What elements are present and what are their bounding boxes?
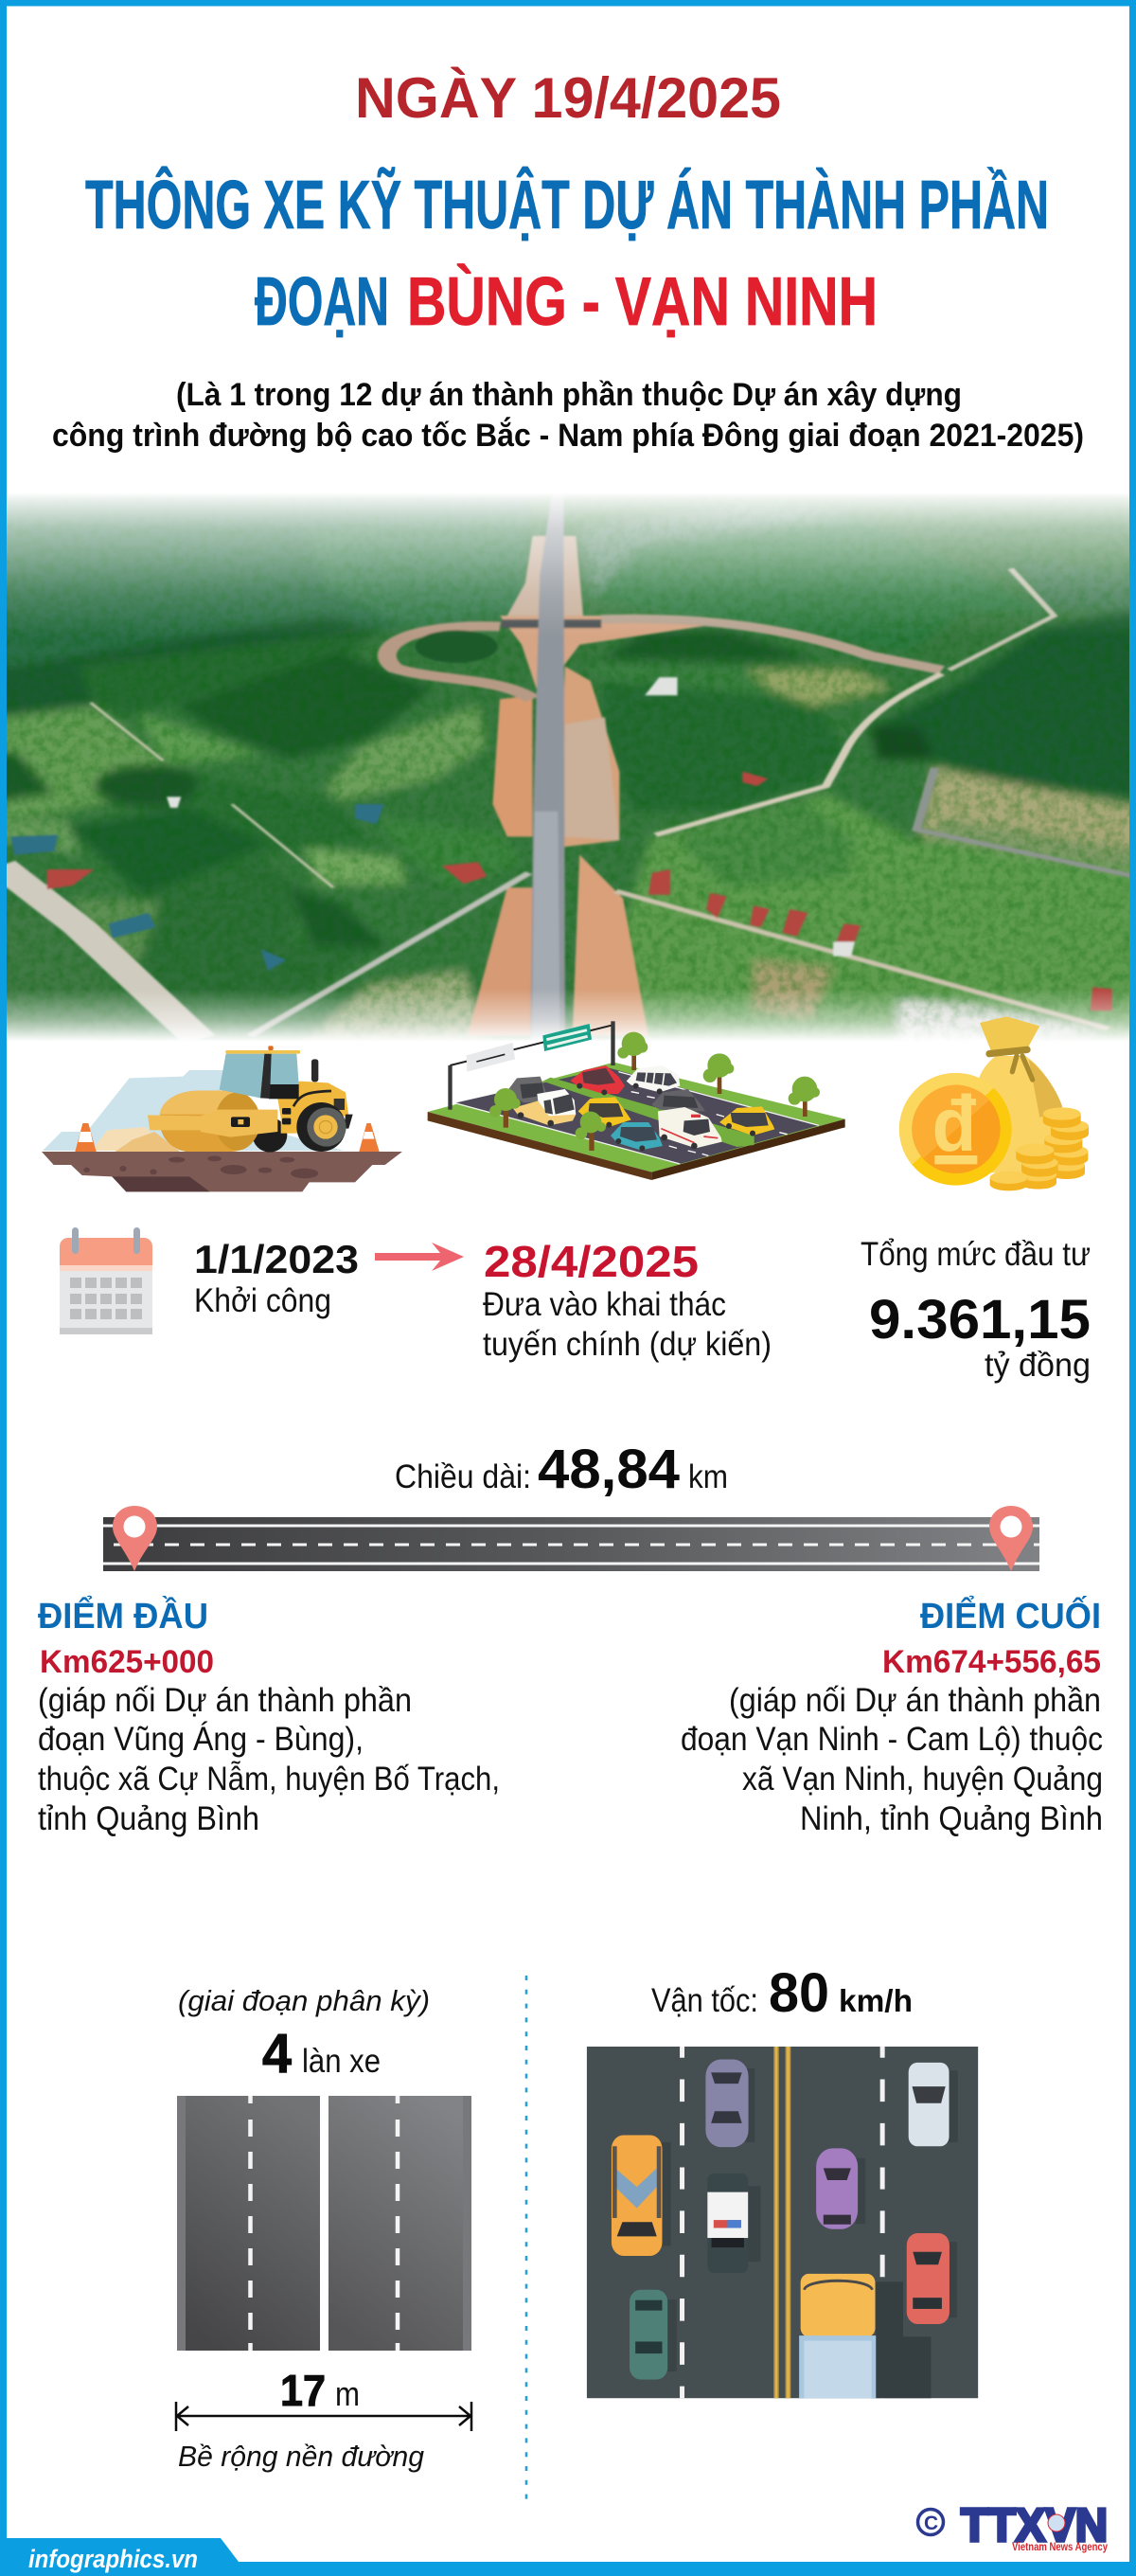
total investment text: Tổng mức đầu tư [861, 1236, 1091, 1273]
lanes label: (giai đoạn phân kỳ) [178, 1984, 430, 2017]
text block: start point: (giáp nối Dự án thành phần [38, 1682, 412, 1719]
agency wordmark: TTXVN [961, 2500, 1108, 2551]
copyright mark [918, 2510, 943, 2534]
logo: TTXVN [918, 2500, 1108, 2553]
text block: end point: (giáp nối Dự án thành phần [729, 1682, 1101, 1719]
sub-icon: white car [909, 2063, 958, 2146]
road strip with start and end pins [103, 1506, 1039, 1571]
copyright mark: C [924, 2513, 938, 2534]
sub-icon: purple car [816, 2148, 865, 2229]
text block: start point [38, 1594, 500, 1837]
length label [395, 1439, 728, 1500]
icon: start pin [113, 1506, 157, 1571]
sub-icon: trees [489, 1032, 820, 1151]
width label and dimension arrow: 17 [280, 2366, 326, 2415]
agency subline: Vietnam News Agency [1012, 2542, 1108, 2553]
heading: main title line 2: ĐOẠN [255, 264, 389, 340]
text block: start point: thuộc xã Cự Nẫm, huyện Bố Trạch, [38, 1761, 500, 1798]
icon: highway with traffic [428, 1021, 845, 1180]
lanes label: 4 [262, 2023, 292, 2084]
speed label: 80 [769, 1962, 829, 2024]
speed label: km/h [839, 1983, 913, 2018]
sub-icon: police car [707, 2174, 761, 2273]
length label: Chiều dài: [395, 1458, 531, 1495]
text block: end point: ĐIỂM CUỐI [920, 1594, 1101, 1637]
width label and dimension arrow [176, 2366, 471, 2473]
speed label: Vận tốc: [651, 1982, 758, 2019]
text block: start point: ĐIỂM ĐẦU [38, 1594, 208, 1637]
title block [52, 66, 1084, 454]
width label and dimension arrow: Bề rộng nền đường [178, 2440, 424, 2473]
length label: 48,84 [538, 1439, 680, 1500]
opening date text: Đưa vào khai thác [483, 1286, 726, 1323]
speed label [651, 1962, 913, 2024]
opening date text: tuyến chính (dự kiến) [483, 1326, 772, 1363]
arrow: start to opening [375, 1243, 464, 1271]
dotted divider [525, 1976, 527, 2506]
start date text [194, 1237, 359, 1319]
sub-icon: red car [907, 2233, 957, 2324]
sub-icon: orange van [612, 2135, 671, 2256]
total investment text [861, 1236, 1091, 1384]
globe in wordmark [1048, 2514, 1065, 2531]
text block: end point: xã Vạn Ninh, huyện Quảng [742, 1761, 1103, 1798]
subtitle text: công trình đường bộ cao tốc Bắc - Nam phía Đông giai đoạn 2021-2025) [52, 418, 1084, 454]
lanes label: làn xe [302, 2043, 381, 2080]
sub-icon: grey-purple car [705, 2059, 754, 2147]
start date text: 1/1/2023 [194, 1237, 359, 1281]
subtitle text [52, 377, 1084, 454]
icon: money bag and dong coins [899, 1016, 1089, 1190]
footer bar with website tab: infographics.vn [28, 2545, 198, 2573]
icon: end pin [989, 1506, 1033, 1571]
icon: calendar [60, 1227, 152, 1334]
road cross-section diagram [177, 2096, 471, 2351]
icon: road roller [42, 1046, 402, 1191]
length label: km [688, 1458, 728, 1495]
aerial photo of expressway interchange [7, 495, 1129, 1040]
total investment text: 9.361,15 [869, 1289, 1091, 1351]
heading: main title line 2 [255, 263, 878, 340]
total investment text: tỷ đồng [985, 1347, 1091, 1384]
opening date text [483, 1237, 772, 1363]
subtitle text: (Là 1 trong 12 dự án thành phần thuộc Dự án xây dựng [176, 377, 962, 413]
footer bar with website tab [0, 2538, 1136, 2576]
text block: end point: đoạn Vạn Ninh - Cam Lộ) thuộc [681, 1721, 1103, 1758]
start date text: Khởi công [194, 1282, 331, 1319]
text block: end point [681, 1594, 1103, 1837]
sub-icon: truck [799, 2274, 876, 2398]
sub-icon: overhead gantry sign [448, 1021, 615, 1110]
text block: start point: Km625+000 [40, 1644, 214, 1680]
icon: money bag and dong coins: đ [932, 1080, 976, 1168]
heading: main title line 2: BÙNG - VẠN NINH [407, 263, 878, 340]
text block: end point: Km674+556,65 [882, 1644, 1101, 1680]
text block: start point: tỉnh Quảng Bình [38, 1800, 259, 1837]
heading: date: NGÀY 19/4/2025 [355, 66, 781, 130]
sub-icon: cars on highway [508, 1065, 774, 1151]
text block: end point: Ninh, tỉnh Quảng Bình [800, 1800, 1103, 1837]
sub-icon: teal car [630, 2290, 677, 2379]
text block: start point: đoạn Vũng Áng - Bùng), [38, 1721, 364, 1758]
opening date text: 28/4/2025 [484, 1237, 699, 1286]
traffic illustration top view [587, 2047, 978, 2398]
width label and dimension arrow: m [335, 2374, 360, 2413]
lanes label [178, 1984, 430, 2084]
